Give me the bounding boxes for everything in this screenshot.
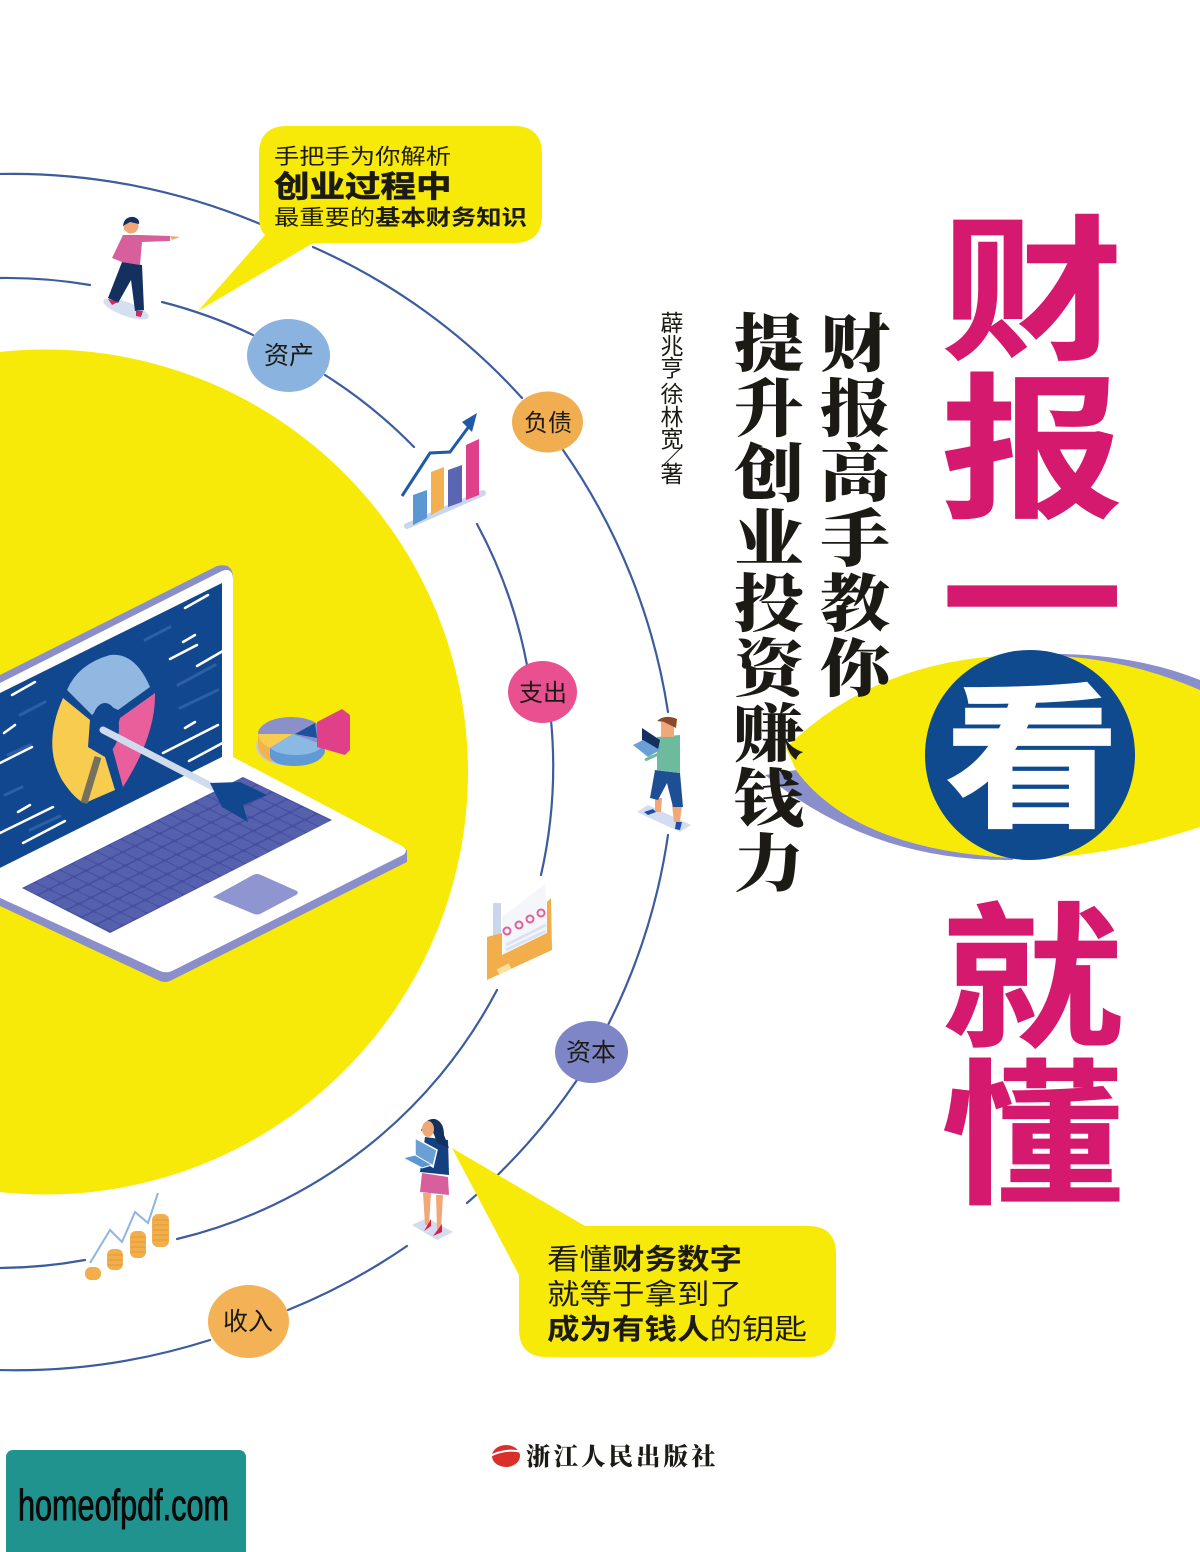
icon: publisher logo (490, 1445, 522, 1467)
laptop lid (0, 565, 233, 890)
node: 负债 (512, 392, 583, 452)
watermark badge: homeofpdf.com (18, 1481, 229, 1530)
node: 收入 (208, 1285, 289, 1358)
title: 一 (941, 515, 1123, 690)
laptop illustration (0, 565, 407, 982)
title (941, 205, 1123, 1224)
figure: man pointing (101, 217, 180, 324)
icon: coin stacks with trend line (85, 1193, 169, 1280)
screen text lines (0, 595, 230, 843)
yellow background circle (0, 350, 468, 1194)
node: 资产 (247, 319, 330, 392)
node: 支出 (508, 661, 577, 723)
eye pupil (925, 650, 1135, 860)
figure: woman with laptop (403, 1119, 453, 1240)
icon: small 3D pie chart (256, 709, 350, 766)
callout: bottom speech bubble: 就等于拿到了 (547, 1279, 742, 1311)
subtitle column 1: 财报高手教你 (820, 311, 897, 705)
title: 懂 (941, 1049, 1123, 1224)
node: 负债: 负债 (524, 410, 572, 437)
callout: bottom speech bubble: 看懂财务数字 (547, 1244, 742, 1276)
callout: top speech bubble (198, 126, 542, 311)
node: 收入: 收入 (223, 1308, 273, 1336)
authors: 薜兆亨徐林宽／著 (660, 310, 684, 487)
keyboard (22, 777, 332, 933)
node: 资本: 资本 (566, 1039, 616, 1067)
node: 支出: 支出 (519, 680, 567, 707)
node: 资本 (555, 1021, 628, 1083)
watermark badge (6, 1450, 246, 1552)
icon: bar chart with rising arrow (402, 413, 483, 526)
title: 报 (941, 363, 1123, 538)
arrow pointer (103, 730, 267, 822)
callout: bottom speech bubble: 成为有钱人的钥匙 (547, 1314, 807, 1346)
callout: top speech bubble: 创业过程中 (274, 170, 451, 203)
callout: bottom speech bubble (452, 1148, 836, 1357)
laptop screen (0, 583, 222, 868)
trackpad (213, 874, 298, 914)
outer orbit ring (0, 174, 668, 1370)
eye graphic (765, 650, 1200, 860)
title: 就 (941, 892, 1123, 1067)
figure: man with laptop (633, 717, 691, 832)
callout: top speech bubble: 手把手为你解析 (274, 145, 451, 169)
title character: 看: 看 (944, 675, 1120, 848)
inner orbit ring (0, 278, 553, 1268)
callout: top speech bubble: 最重要的基本财务知识 (274, 206, 527, 230)
icon: report folder (487, 884, 552, 980)
title: 财 (941, 205, 1123, 380)
laptop base (0, 850, 407, 982)
publisher: 浙江人民出版社 (526, 1443, 718, 1471)
screen pie chart (52, 655, 155, 803)
node: 资产: 资产 (264, 342, 314, 370)
subtitle column 2: 提升创业投资赚钱力 (734, 311, 811, 900)
